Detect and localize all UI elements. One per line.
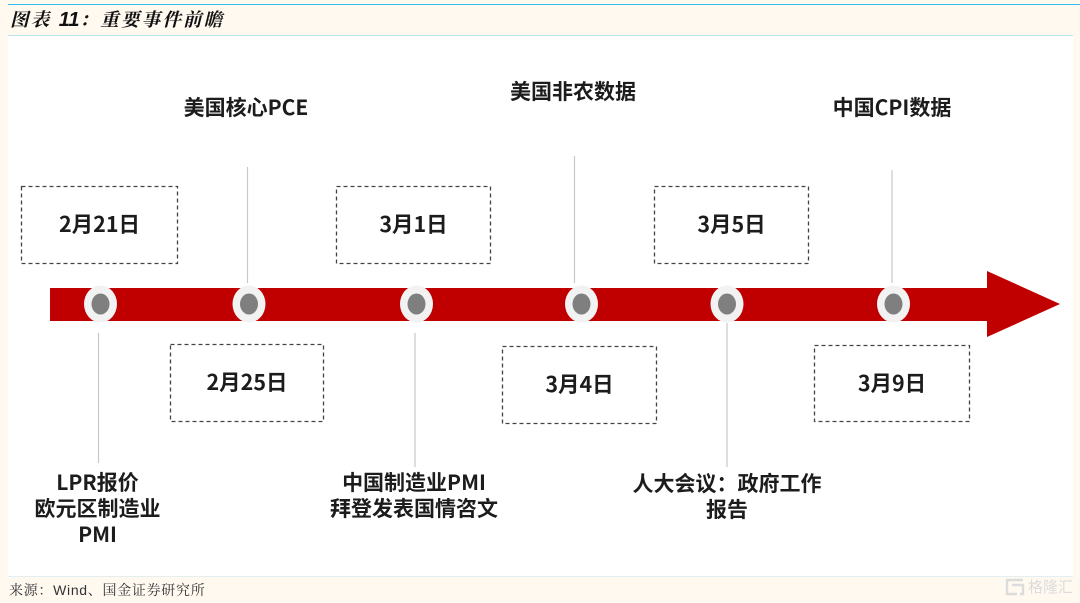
date box: 3月5日: 3月5日 bbox=[697, 208, 766, 238]
event label: 中国制造业PMI 拜登发表国情咨文: 中国制造业PMI bbox=[342, 467, 486, 497]
date box: 2月21日 bbox=[21, 186, 178, 264]
top rule bbox=[8, 4, 1080, 5]
date box: 3月9日 bbox=[814, 345, 970, 423]
date box: 2月25日: 2月25日 bbox=[206, 366, 288, 396]
icon: watermark logo bbox=[1006, 578, 1024, 596]
event label: LPR报价 欧元区制造业 PMI bbox=[34, 467, 160, 549]
event label: LPR报价 欧元区制造业 PMI: PMI bbox=[78, 519, 117, 549]
date box: 3月5日 bbox=[654, 186, 809, 264]
event label: 人大会议：政府工作报告: 人大会议：政府工作 bbox=[632, 468, 822, 498]
timeline nodes bbox=[84, 286, 910, 322]
date box: 3月1日: 3月1日 bbox=[379, 208, 448, 238]
date box: 3月4日 bbox=[502, 346, 657, 424]
event label: 中国制造业PMI 拜登发表国情咨文: 拜登发表国情咨文 bbox=[330, 493, 498, 523]
watermark text: 格隆汇 bbox=[1028, 576, 1073, 597]
event label: 人大会议：政府工作报告 bbox=[632, 468, 822, 524]
date box: 2月21日: 2月21日 bbox=[59, 208, 140, 238]
watermark bbox=[1006, 576, 1073, 597]
event label: 中国CPI数据: 中国CPI数据 bbox=[833, 92, 951, 122]
title: 图表 11：重要事件前瞻 bbox=[10, 9, 224, 31]
event label: 人大会议：政府工作报告: 报告 bbox=[706, 494, 748, 524]
event label: LPR报价 欧元区制造业 PMI: 欧元区制造业 bbox=[34, 493, 160, 523]
event label: 美国核心PCE: 美国核心PCE bbox=[184, 92, 308, 122]
date box: 3月4日: 3月4日 bbox=[545, 368, 614, 398]
event label: LPR报价 欧元区制造业 PMI: LPR报价 bbox=[56, 467, 139, 497]
event label: 中国制造业PMI 拜登发表国情咨文 bbox=[330, 467, 498, 523]
date box: 3月1日 bbox=[336, 186, 491, 264]
timeline arrow bbox=[50, 271, 1060, 337]
date box: 2月25日 bbox=[170, 344, 324, 422]
date box: 3月9日: 3月9日 bbox=[858, 366, 926, 398]
source note: 来源：Wind、国金证券研究所 bbox=[9, 582, 205, 598]
connector lines bbox=[98, 156, 892, 467]
event label: 美国非农数据: 美国非农数据 bbox=[510, 76, 636, 106]
